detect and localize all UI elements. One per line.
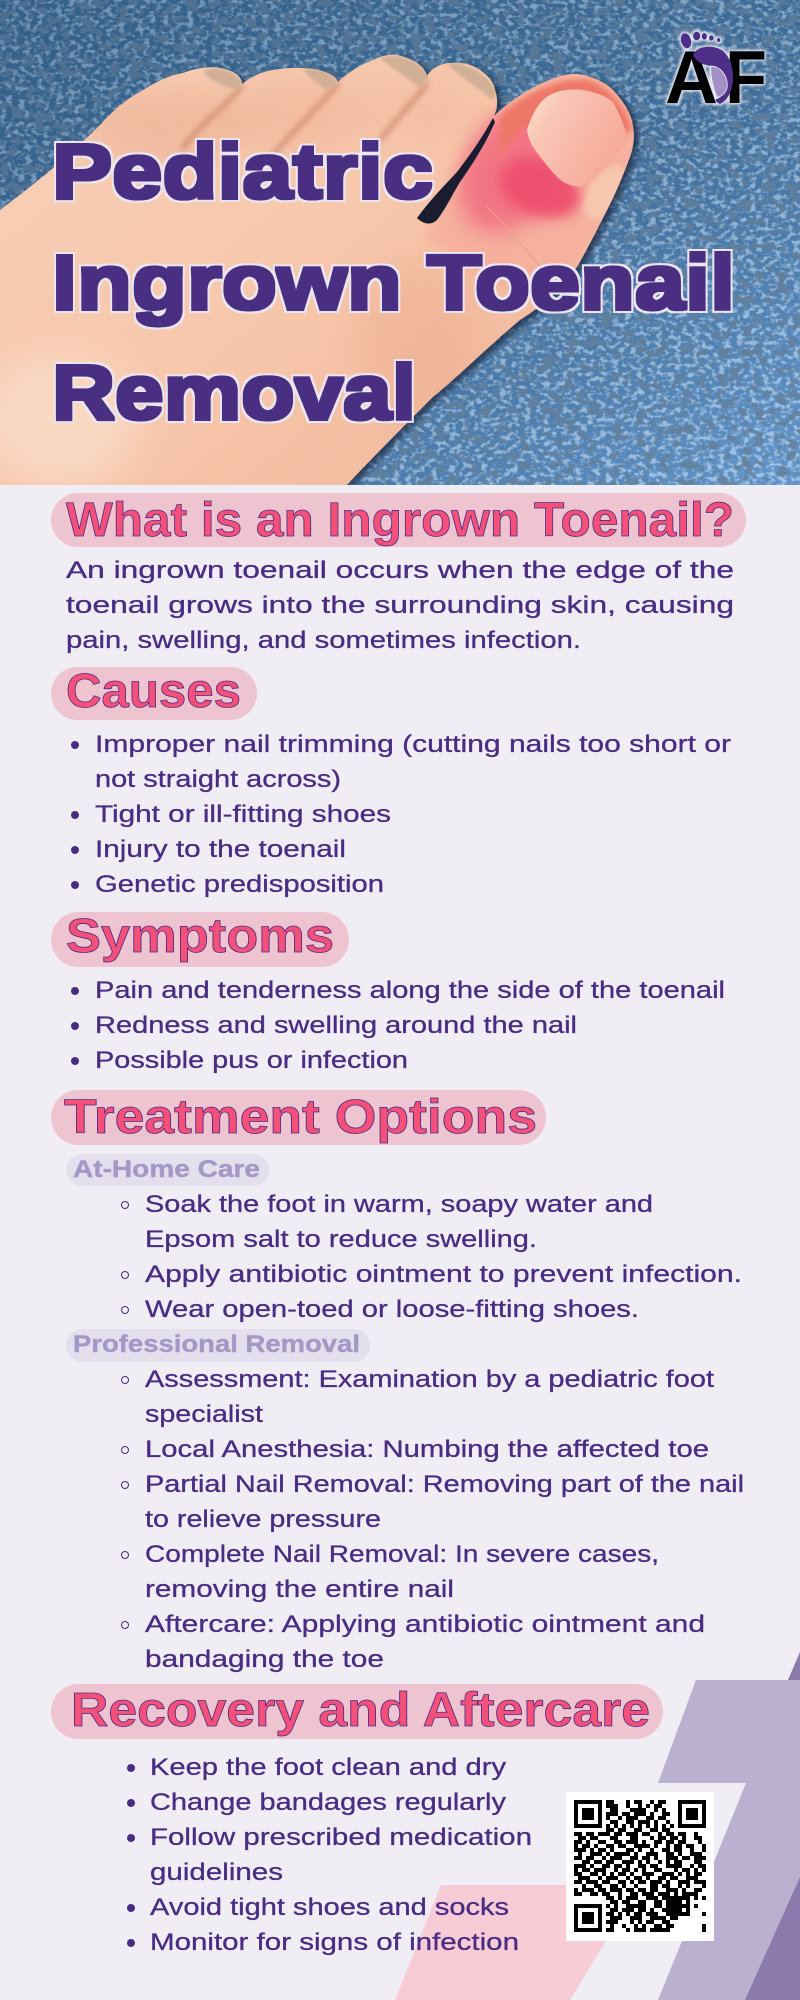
causes list: Tight or ill-fitting shoes xyxy=(95,801,391,828)
decorative angled shapes xyxy=(395,1652,800,2000)
at-home care list: Soak the foot in warm, soapy water and xyxy=(145,1191,653,1218)
subheading: Professional Removal xyxy=(66,1329,370,1362)
toe separators xyxy=(183,84,427,155)
heading: Treatment Options: Treatment Options xyxy=(64,1091,537,1144)
title: Ingrown Toenail xyxy=(52,240,735,326)
small toenails xyxy=(203,56,496,100)
professional removal list xyxy=(122,1366,744,1673)
big toe base xyxy=(425,70,640,300)
professional removal list: Assessment: Examination by a pediatric foot xyxy=(145,1366,714,1393)
logo letters: F xyxy=(725,35,767,119)
symptoms list xyxy=(71,977,725,1074)
recovery list: guidelines xyxy=(150,1859,283,1886)
definition paragraph xyxy=(66,557,734,654)
shadow under foot xyxy=(214,54,643,485)
professional removal list: Aftercare: Applying antibiotic ointment and xyxy=(145,1611,705,1638)
logo: AF foot mark xyxy=(665,32,767,119)
heading: Recovery and Aftercare: Recovery and Aftercare xyxy=(71,1684,650,1737)
subheading: At-Home Care xyxy=(66,1154,269,1186)
professional removal list: bandaging the toe xyxy=(145,1646,384,1673)
blue woven fabric xyxy=(0,0,800,485)
symptoms list: Redness and swelling around the nail xyxy=(95,1012,577,1039)
causes list: not straight across) xyxy=(95,766,341,793)
symptoms list: Pain and tenderness along the side of the toenail xyxy=(95,977,725,1004)
recovery list: Follow prescribed medication xyxy=(150,1824,532,1851)
at-home care list xyxy=(122,1191,742,1323)
professional removal list: removing the entire nail xyxy=(145,1576,454,1603)
causes list xyxy=(71,731,731,898)
professional removal list: Local Anesthesia: Numbing the affected toe xyxy=(145,1436,709,1463)
subheading: Professional Removal: Professional Removal xyxy=(73,1331,360,1358)
professional removal list: Complete Nail Removal: In severe cases, xyxy=(145,1541,659,1568)
heading: What is an Ingrown Toenail?: What is an Ingrown Toenail? xyxy=(66,494,734,547)
logo letters: A xyxy=(665,35,718,119)
at-home care list: Epsom salt to reduce swelling. xyxy=(145,1226,537,1253)
at-home care list: Apply antibiotic ointment to prevent infection. xyxy=(145,1261,742,1288)
skin crease xyxy=(487,207,540,267)
hero photo: inflamed big toe on blue fabric xyxy=(0,0,800,490)
QR code xyxy=(566,1792,714,1941)
title: Removal xyxy=(52,350,416,436)
QR finder patterns xyxy=(574,1800,706,1932)
at-home care list: Wear open-toed or loose-fitting shoes. xyxy=(145,1296,639,1323)
causes list: Genetic predisposition xyxy=(95,871,384,898)
big toenail xyxy=(527,90,627,187)
causes list: Injury to the toenail xyxy=(95,836,346,863)
heading: Symptoms: Symptoms xyxy=(66,910,334,963)
subheading: At-Home Care: At-Home Care xyxy=(73,1156,260,1183)
recovery list: Monitor for signs of infection xyxy=(150,1929,519,1956)
professional removal list: to relieve pressure xyxy=(145,1506,381,1533)
recovery list: Avoid tight shoes and socks xyxy=(150,1894,509,1921)
recovery list xyxy=(127,1754,532,1956)
professional removal list: specialist xyxy=(145,1401,263,1428)
shadow gap between toes xyxy=(417,118,495,224)
heading: Causes: Causes xyxy=(66,665,241,718)
causes list: Improper nail trimming (cutting nails too short or xyxy=(95,731,731,758)
logo foot xyxy=(679,32,733,104)
foot shape with toes xyxy=(0,54,634,485)
logo letters xyxy=(665,35,767,119)
title: Pediatric xyxy=(52,129,433,215)
professional removal list: Partial Nail Removal: Removing part of the nail xyxy=(145,1471,744,1498)
inflammation xyxy=(448,98,550,242)
recovery list: Keep the foot clean and dry xyxy=(150,1754,506,1781)
definition paragraph: An ingrown toenail occurs when the edge of the xyxy=(66,557,734,584)
title xyxy=(52,129,735,436)
definition paragraph: toenail grows into the surrounding skin, causing xyxy=(66,592,734,619)
recovery list: Change bandages regularly xyxy=(150,1789,506,1816)
symptoms list: Possible pus or infection xyxy=(95,1047,408,1074)
definition paragraph: pain, swelling, and sometimes infection. xyxy=(66,627,581,654)
